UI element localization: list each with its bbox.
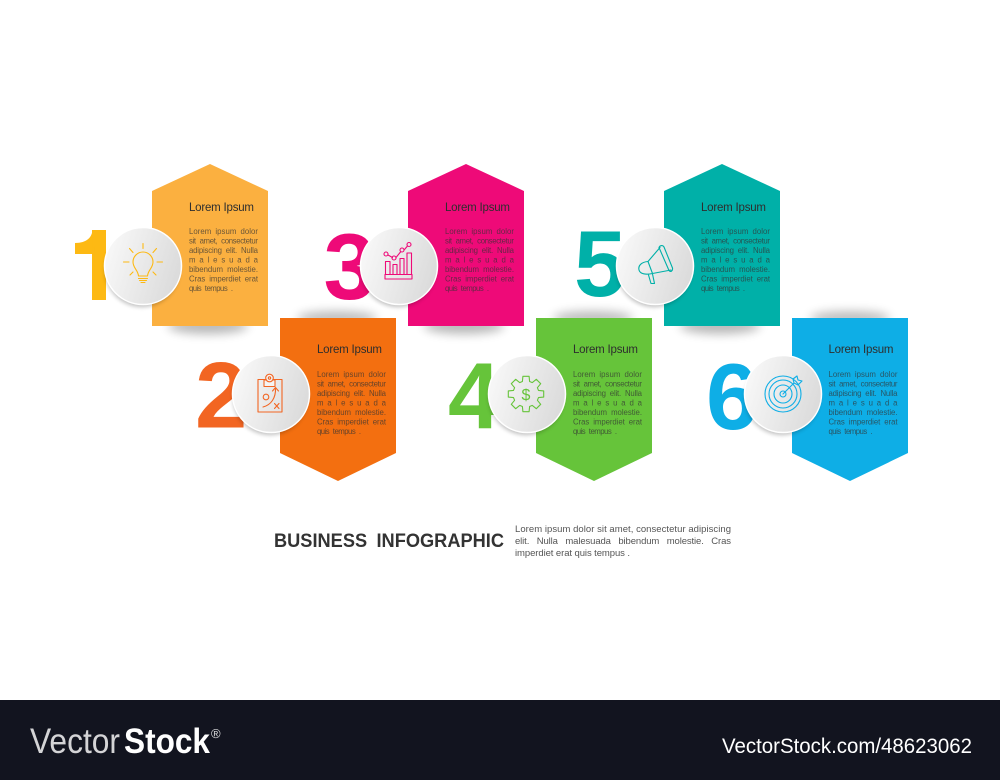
body text: m a l e s u a d a [828,398,898,408]
icon: target with dart [765,376,802,412]
body text [317,370,387,436]
step 1 [73,164,268,334]
icon: gear with dollar: $ [522,387,531,404]
step 4 [448,311,652,481]
panel shadow [168,318,248,334]
body text [189,227,259,293]
body text: quis tempus . [573,427,617,436]
heading: Lorem Ipsum [573,344,638,356]
icon: bar chart with trend line [384,242,412,279]
body text [573,370,643,436]
body text: adipiscing elit. Nulla [701,246,771,255]
step 3 [324,164,524,334]
icon: light bulb [124,244,162,282]
body text: sit amet, consectetur [828,380,898,388]
panel 4 [536,318,652,481]
number 3: 3 [324,214,376,319]
panel 5 [664,164,780,326]
panel shadow [297,311,377,325]
body text: bibendum molestie. [828,408,898,417]
bottom description: Lorem ipsum dolor sit amet, consectetur adipiscing [515,524,731,535]
body text [445,227,515,293]
circle shadow [489,361,563,435]
number 2: 2 [195,342,247,448]
body text: sit amet, consectetur [701,236,770,246]
heading: Lorem Ipsum [189,202,254,214]
footer bar [0,700,1000,780]
body text: Lorem ipsum dolor [828,370,898,379]
step 5 [574,164,780,334]
panel shadow [680,318,760,334]
body text: m a l e s u a d a [701,256,771,264]
bottom title: BUSINESS INFOGRAPHIC [274,531,504,552]
body text: quis tempus . [445,284,489,293]
body text: Cras imperdiet erat [701,274,771,284]
footer image id: VectorStock.com/48623062 [722,735,972,758]
bottom description: elit. Nulla malesuada bibendum molestie. Cras [515,536,731,547]
circle badge [232,356,310,432]
circle shadow [361,233,435,307]
body text: sit amet, consectetur [445,236,514,246]
circle shadow [745,361,819,435]
panel shadow [810,311,890,325]
circle badge [616,228,694,304]
heading: Lorem Ipsum [828,344,894,356]
heading: Lorem Ipsum [445,202,510,214]
body text: Cras imperdiet erat [828,418,898,426]
footer logo: Stock [124,722,210,761]
number 6: 6 [706,344,758,449]
body text [701,227,771,293]
footer logo: Vector [30,722,120,761]
body text: Lorem ipsum dolor [701,227,770,236]
body text: bibendum molestie. [573,408,642,417]
body text: Cras imperdiet erat [317,418,387,426]
body text: Lorem ipsum dolor [573,370,642,379]
body text: quis tempus . [317,427,361,436]
bottom description [515,524,731,559]
heading: Lorem Ipsum [317,344,382,356]
circle badge [360,228,438,304]
panel 1 [152,164,268,326]
circle badge [488,356,566,432]
footer logo: ® [211,726,221,741]
circle shadow [233,361,307,435]
body text: Cras imperdiet erat [573,418,643,426]
heading: Lorem Ipsum [701,202,766,214]
body text: adipiscing elit. Nulla [828,389,898,398]
panel 2 [280,318,396,481]
body text: bibendum molestie. [701,265,770,274]
body text: quis tempus . [828,427,872,436]
body text: Cras imperdiet erat [445,274,515,284]
number 4: 4 [448,343,500,448]
body text: bibendum molestie. [189,265,258,274]
body text: m a l e s u a d a [445,256,515,264]
body text: Lorem ipsum dolor [189,227,258,236]
body text: bibendum molestie. [317,408,386,417]
footer logo [30,722,221,761]
number 1: 1 [73,215,125,320]
bottom description: imperdiet erat quis tempus . [515,548,630,559]
body text: Cras imperdiet erat [189,274,259,284]
body text: sit amet, consectetur [317,380,386,388]
body text: Lorem ipsum dolor [445,227,514,236]
icon: megaphone [639,246,673,284]
body text: adipiscing elit. Nulla [317,389,387,398]
circle badge [104,228,182,304]
number 1 [75,230,106,300]
panel 6 [792,318,908,481]
icon: gear with dollar [508,376,544,412]
step 6 [706,311,908,481]
panel shadow [424,318,504,334]
body text: m a l e s u a d a [189,256,259,264]
body text: quis tempus . [701,284,745,293]
body text: bibendum molestie. [445,265,514,274]
number 5: 5 [574,211,626,316]
body text: Lorem ipsum dolor [317,370,386,379]
body text: m a l e s u a d a [317,398,387,408]
body text: adipiscing elit. Nulla [573,389,643,398]
step 2 [195,311,396,481]
circle shadow [617,233,691,307]
body text: sit amet, consectetur [573,380,642,388]
circle badge [744,356,822,432]
body text [828,370,898,436]
body text: quis tempus . [189,284,233,293]
panel shadow [553,311,633,325]
body text: adipiscing elit. Nulla [189,246,259,255]
body text: sit amet, consectetur [189,236,258,246]
panel 3 [408,164,524,326]
body text: adipiscing elit. Nulla [445,246,515,255]
body text: m a l e s u a d a [573,398,643,408]
icon: clipboard plan [258,374,282,412]
circle shadow [105,233,179,307]
